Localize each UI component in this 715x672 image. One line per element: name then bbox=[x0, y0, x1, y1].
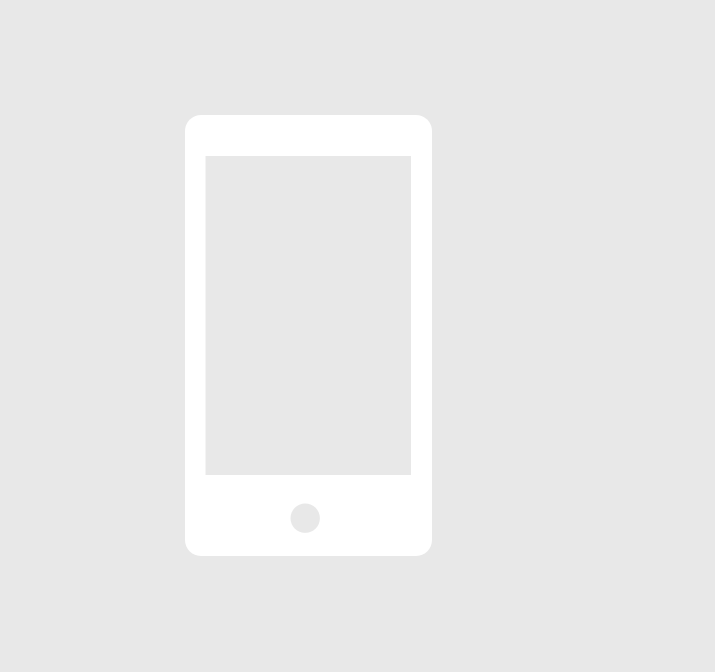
phone screen bbox=[206, 156, 411, 475]
icon: smartphone bbox=[185, 115, 432, 556]
phone body bbox=[185, 115, 432, 556]
home button bbox=[290, 504, 320, 533]
